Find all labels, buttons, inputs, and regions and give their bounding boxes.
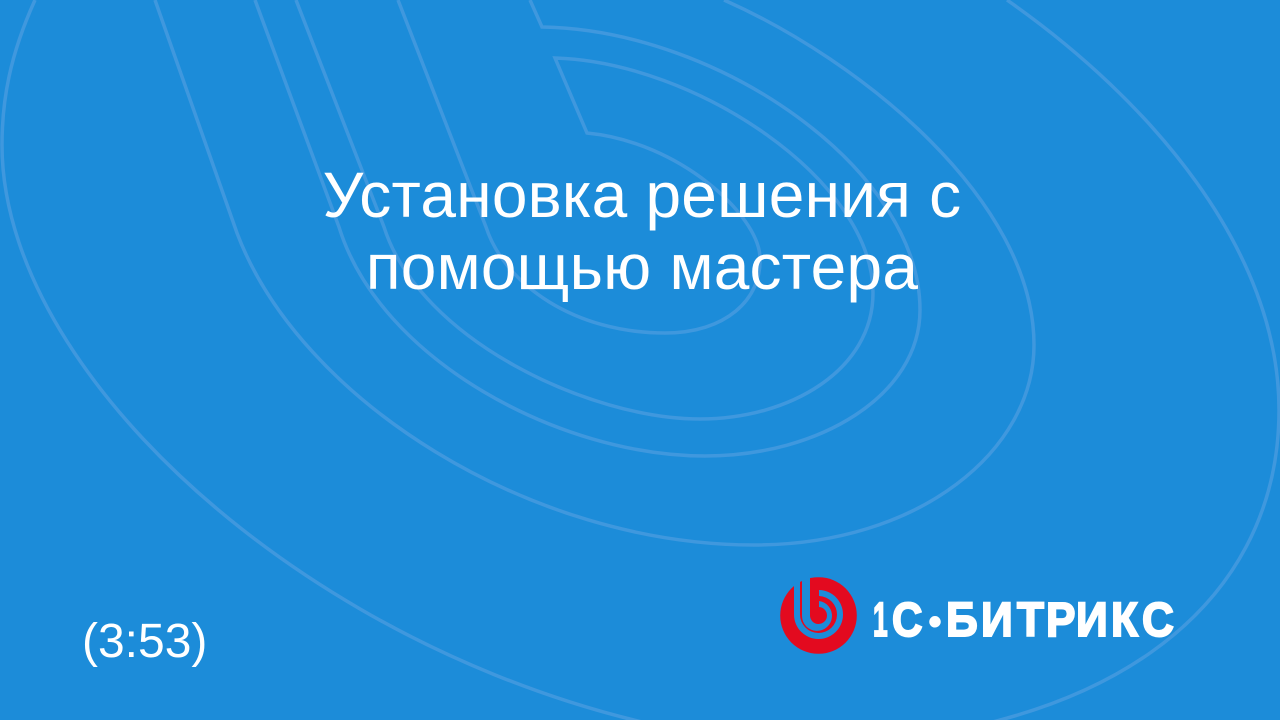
wordmark: БИТРИКС (946, 592, 1174, 646)
wordmark: • (928, 600, 942, 644)
wordmark: С (892, 592, 923, 647)
title: Установка решения с (323, 159, 961, 231)
title: помощью мастера (366, 231, 918, 303)
icon: red disc with nested b (780, 572, 857, 654)
wordmark: 1 (873, 594, 888, 647)
title (323, 159, 961, 303)
duration label: (3:53) (82, 615, 207, 668)
